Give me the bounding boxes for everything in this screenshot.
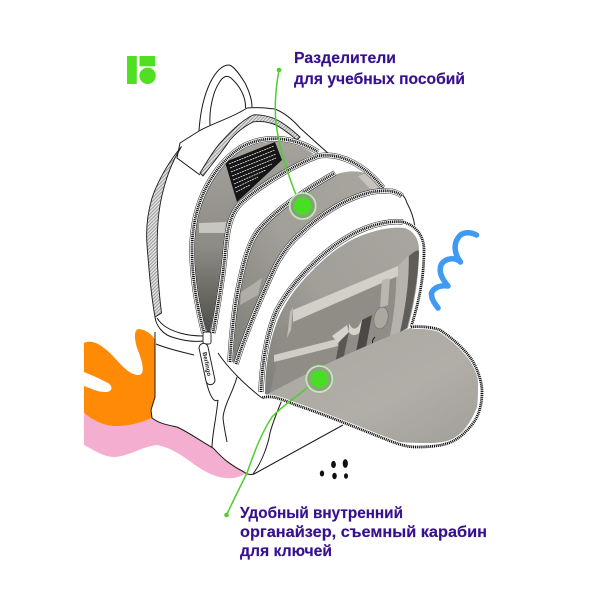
organizer panel bbox=[270, 250, 419, 395]
logo bbox=[127, 56, 156, 84]
divider fold bbox=[240, 278, 262, 305]
shoulder and body outlines bbox=[147, 108, 415, 475]
divider strap bbox=[199, 222, 226, 233]
top strap fold bbox=[358, 173, 380, 190]
compartment 2 interior bbox=[233, 171, 384, 364]
caption: dividers: для учебных пособий bbox=[294, 71, 465, 88]
dark side shadow bbox=[400, 250, 419, 332]
pen loops bbox=[335, 332, 349, 364]
caption: dividers: Разделители bbox=[294, 50, 396, 67]
caption: organizer: для ключей bbox=[240, 543, 332, 560]
front flap bbox=[264, 327, 478, 443]
marker: organizer bbox=[306, 366, 332, 392]
compartment 1 interior bbox=[194, 142, 314, 332]
black care label bbox=[225, 142, 282, 202]
leader line 2 bbox=[224, 386, 309, 517]
caption: organizer: органайзер, съемный карабин bbox=[240, 524, 487, 541]
pink blob bbox=[84, 413, 247, 478]
backpack bbox=[147, 65, 482, 475]
zipper pull: Berlingo bbox=[201, 352, 212, 377]
upper strap bbox=[293, 266, 398, 322]
orange blob bbox=[84, 329, 155, 426]
light side band bbox=[390, 256, 409, 336]
caption: organizer: Удобный внутренний bbox=[240, 505, 403, 522]
zipper pull bbox=[198, 332, 216, 385]
compartment 3 interior bbox=[265, 228, 419, 398]
leader line 1 bbox=[275, 68, 298, 200]
marker: dividers bbox=[290, 193, 316, 219]
buckle strap bbox=[380, 278, 390, 308]
handle bbox=[199, 65, 252, 131]
lower strap bbox=[274, 339, 338, 362]
speckle dots bbox=[320, 459, 348, 479]
zippers bbox=[192, 139, 482, 447]
blue squiggle bbox=[431, 233, 476, 308]
